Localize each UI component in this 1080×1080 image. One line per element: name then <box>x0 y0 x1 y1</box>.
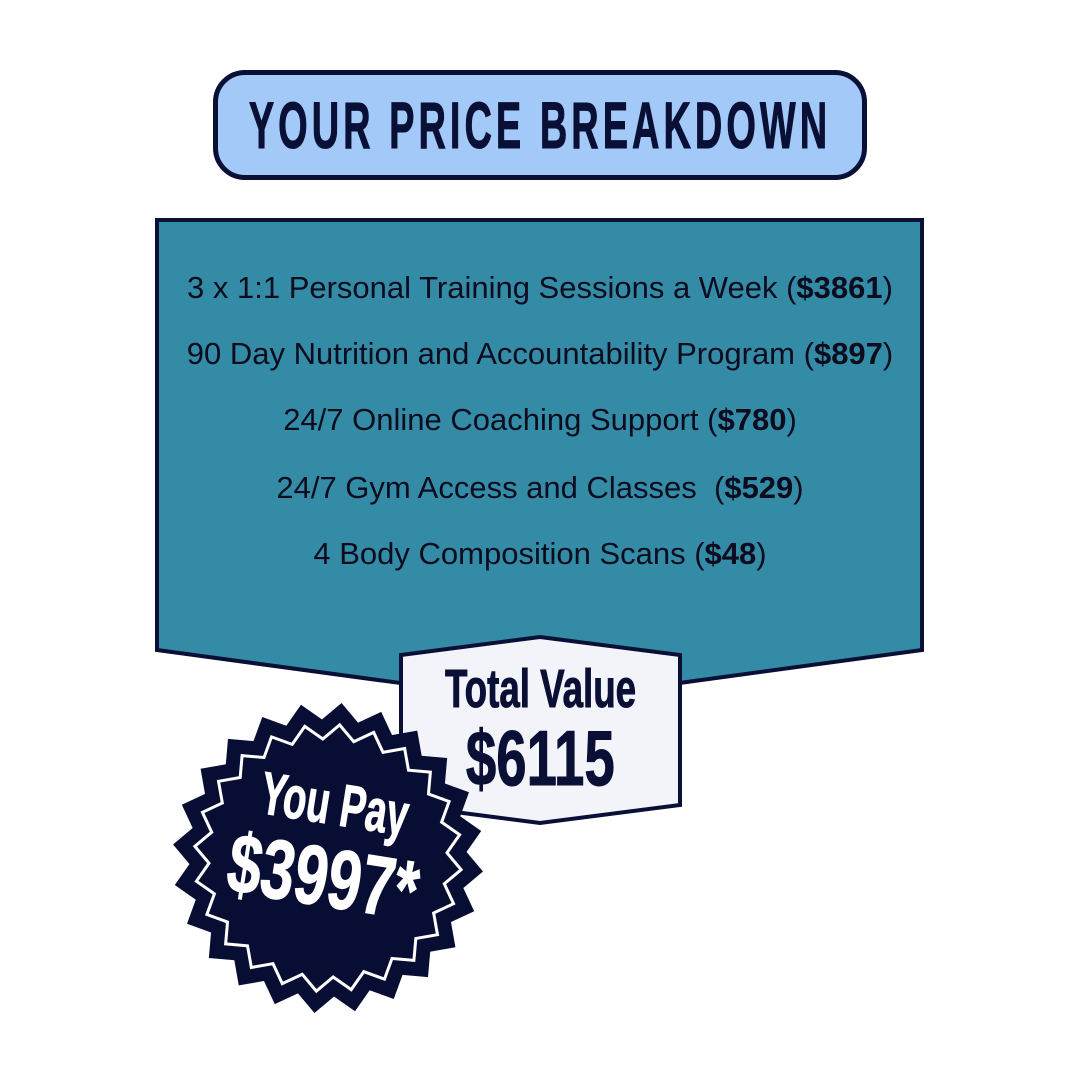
item list <box>187 270 893 571</box>
item list: 24/7 Online Coaching Support ($780) <box>283 402 797 437</box>
total value box <box>399 635 682 825</box>
total value box: $6115 <box>466 714 615 802</box>
title pill <box>213 70 867 180</box>
item list: 3 x 1:1 Personal Training Sessions a Week ($3861) <box>187 270 893 305</box>
badge: you pay: You Pay <box>256 759 413 849</box>
badge: you pay <box>173 703 483 1013</box>
badge: you pay: $3997* <box>221 815 425 938</box>
item list: 24/7 Gym Access and Classes ($529) <box>276 470 804 505</box>
title pill: YOUR PRICE BREAKDOWN <box>249 88 831 162</box>
item list: 4 Body Composition Scans ($48) <box>313 536 767 571</box>
total value box: Total Value <box>445 659 636 719</box>
item list: 90 Day Nutrition and Accountability Program ($897) <box>187 336 893 371</box>
